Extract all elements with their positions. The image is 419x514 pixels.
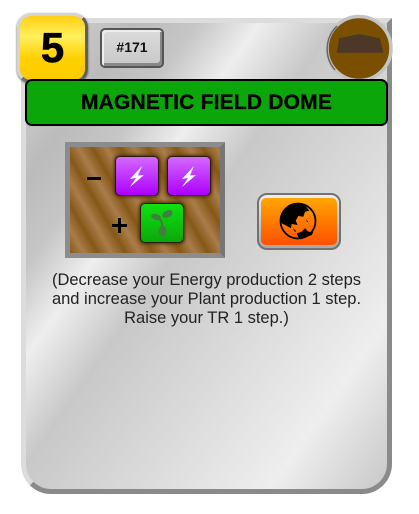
card number tag: #171 [116, 39, 148, 55]
tile orange face [261, 198, 337, 245]
description text: (Decrease your Energy production 2 steps [52, 271, 361, 289]
cost badge: 5 [41, 24, 64, 71]
tag icon: building [326, 14, 393, 79]
title bar [25, 79, 388, 126]
description text: and increase your Plant production 1 step. [52, 290, 361, 308]
card number tag [100, 28, 164, 68]
cost badge [17, 13, 88, 83]
energy resource 2 [167, 156, 211, 196]
minus sign [87, 177, 101, 180]
global requirement tile [257, 193, 341, 250]
description text: Raise your TR 1 step.) [124, 309, 289, 327]
plant resource [140, 203, 184, 243]
icon: globe [280, 202, 316, 240]
energy resource 1 [115, 156, 159, 196]
panel: production box [65, 142, 225, 258]
title bar: MAGNETIC FIELD DOME [81, 91, 332, 114]
description text [52, 271, 361, 327]
plus sign [112, 218, 127, 233]
